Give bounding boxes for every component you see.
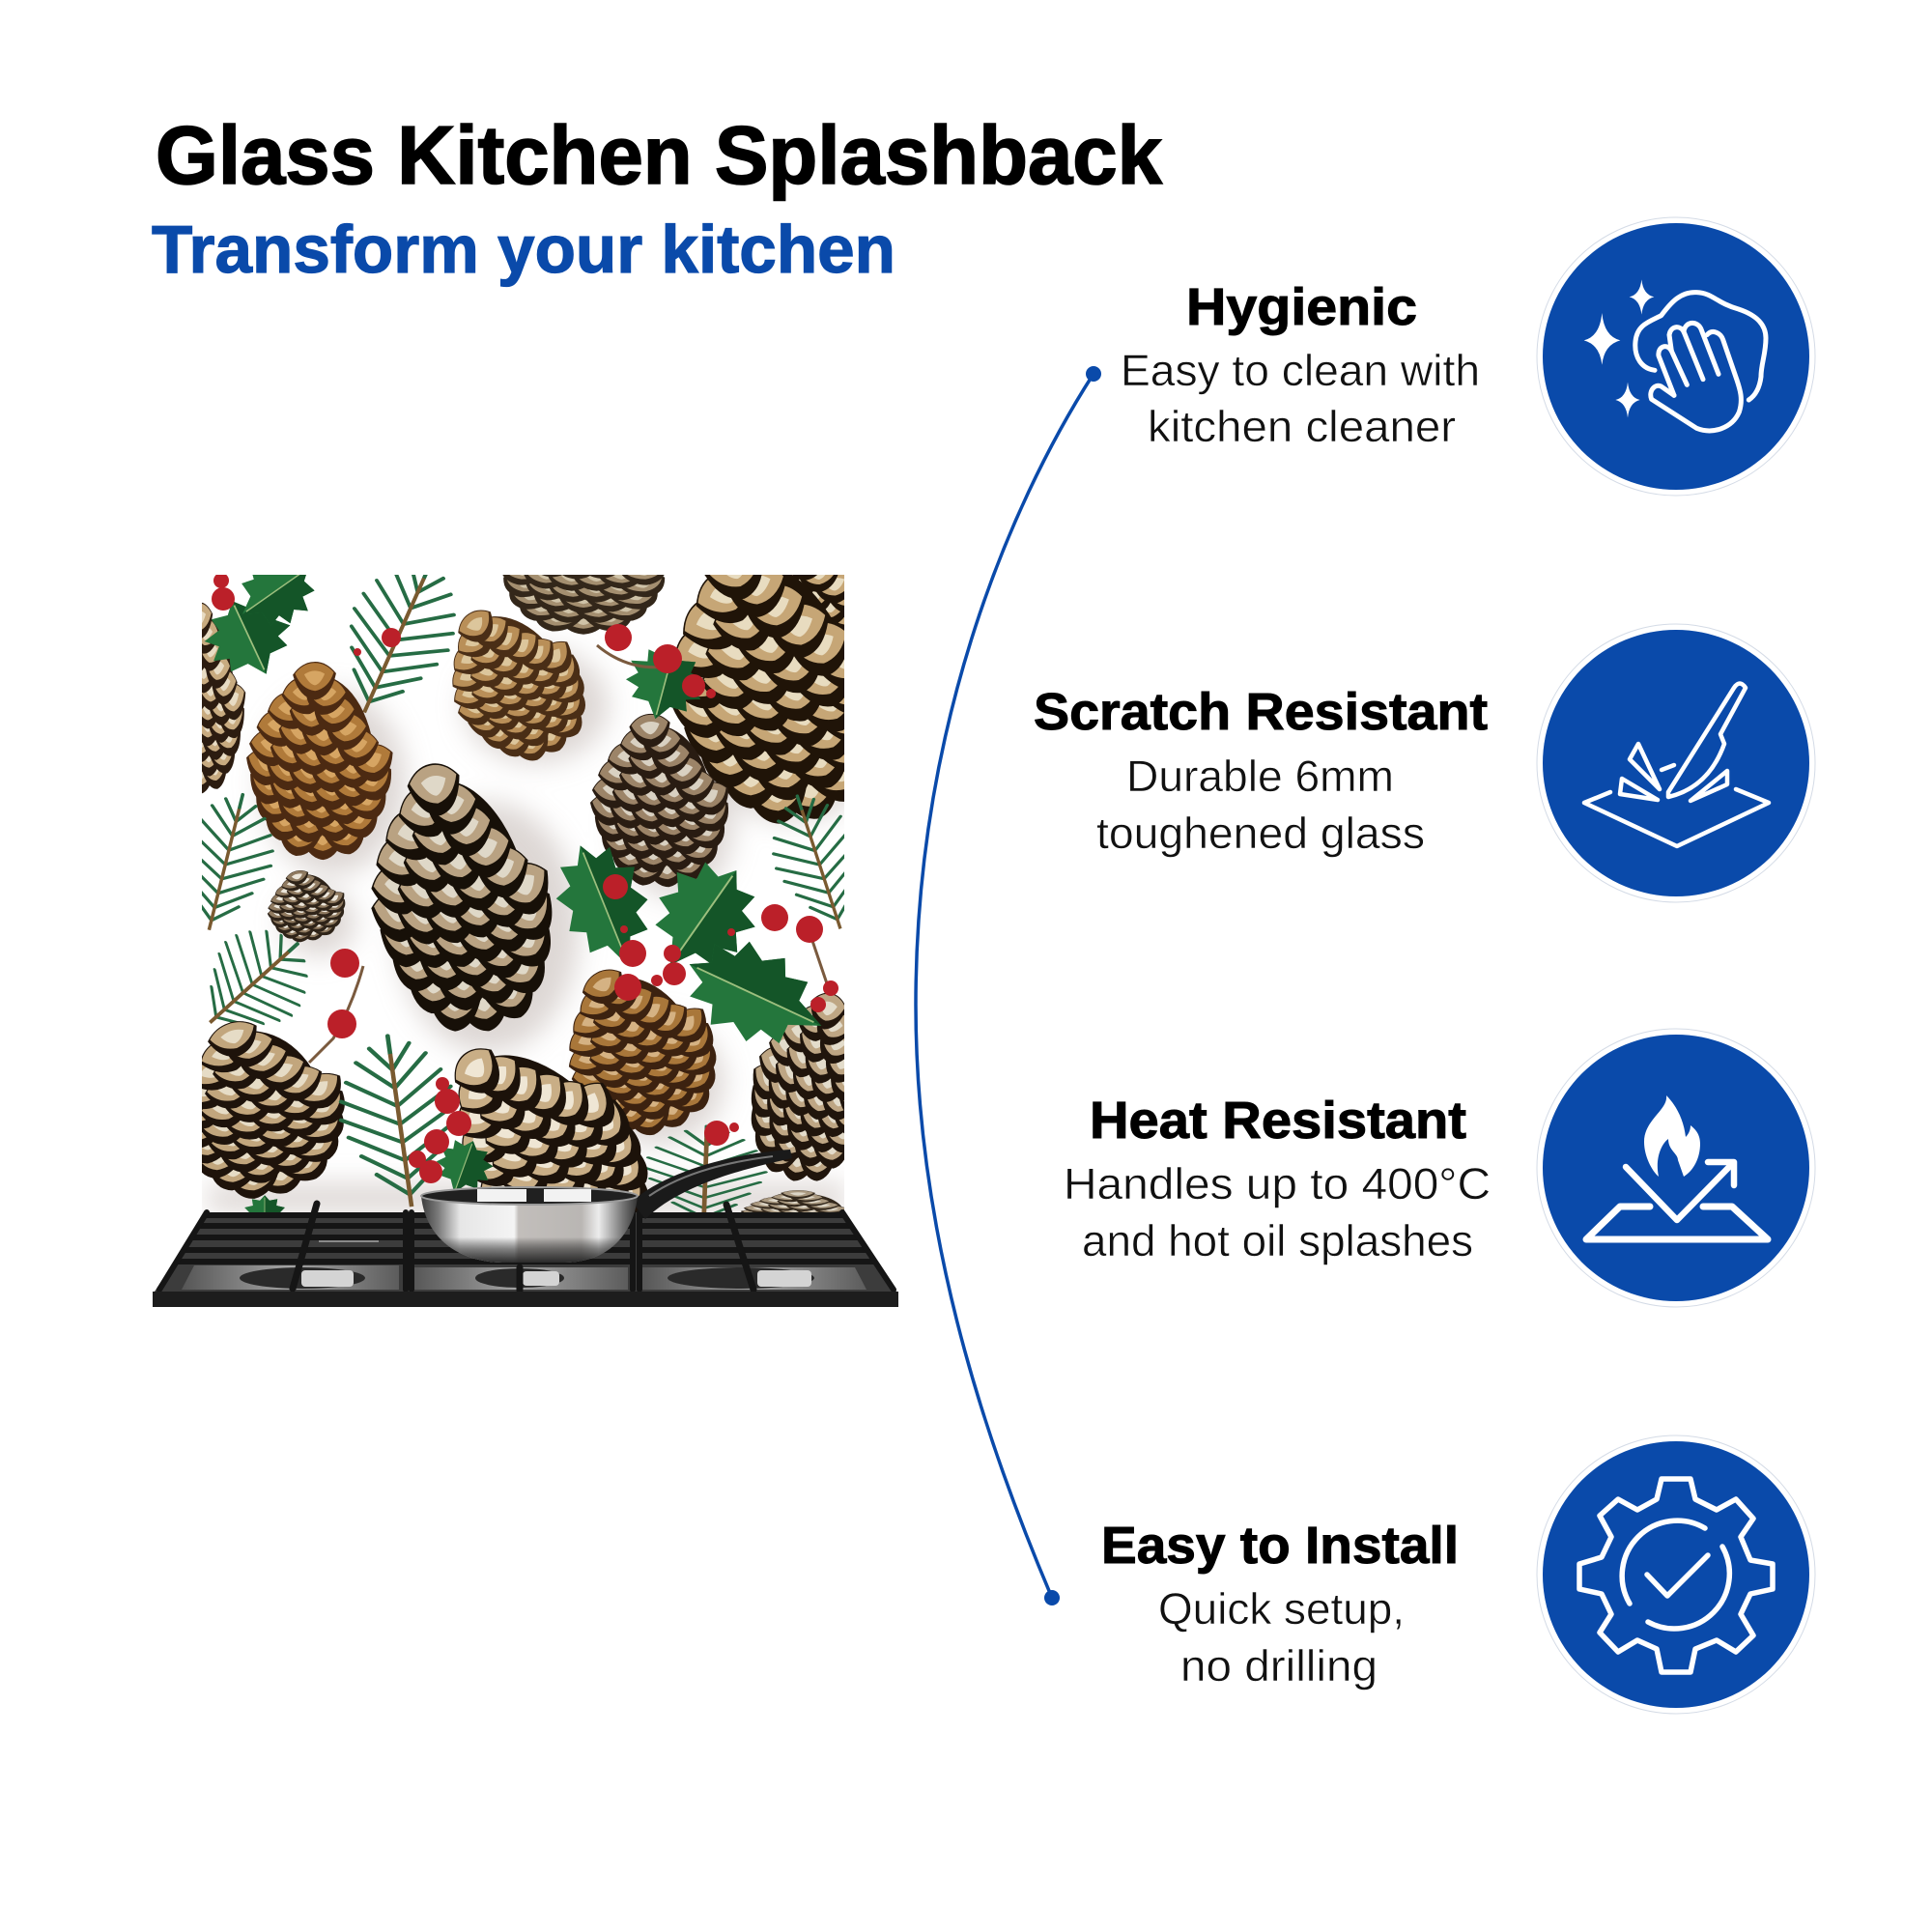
sprig: left middle <box>202 792 274 931</box>
feature: easy to install <box>1101 1517 1459 1690</box>
hob front edge <box>153 1292 898 1307</box>
feature: scratch resistant: Scratch Resistant <box>1034 683 1488 741</box>
cone: top centre <box>502 575 665 635</box>
cone: lower left <box>202 1021 345 1199</box>
cone: small round <box>267 870 346 943</box>
icon: easy to install gear <box>1537 1435 1815 1714</box>
red berries <box>212 573 838 1183</box>
feature: scratch resistant: Durable 6mm <box>1126 752 1394 801</box>
burners <box>240 1235 814 1289</box>
feature: heat resistant: Heat Resistant <box>1090 1092 1466 1150</box>
sprig: bottom right <box>645 1124 768 1212</box>
pan <box>421 1150 792 1263</box>
grates <box>159 1204 894 1291</box>
gas hob <box>153 1204 898 1307</box>
cone: right middle <box>590 713 728 887</box>
title: Glass Kitchen Splashback <box>156 110 1163 202</box>
hob steel panels <box>182 1265 867 1290</box>
holly leaves <box>194 540 840 1236</box>
feature: scratch resistant <box>1034 683 1488 858</box>
sprig: right <box>772 794 844 929</box>
feature: heat resistant <box>1064 1092 1491 1265</box>
feature: hygienic: Easy to clean with <box>1121 346 1480 395</box>
feature: heat resistant: Handles up to 400°C <box>1064 1159 1491 1208</box>
sprig: bottom left centre <box>338 1034 453 1208</box>
cone: lower centre brown <box>568 970 717 1136</box>
icon: scratch resistant knife <box>1537 624 1815 902</box>
feature: easy to install: no drilling <box>1180 1641 1378 1690</box>
icon: hygienic cleaning hand <box>1537 217 1815 496</box>
feature: heat resistant: and hot oil splashes <box>1082 1216 1473 1265</box>
pan rim <box>421 1187 638 1205</box>
feature: hygienic: Hygienic <box>1186 278 1417 336</box>
feature: hygienic <box>1121 278 1480 451</box>
cone: upper left brown <box>246 662 393 860</box>
cone: left edge <box>202 603 245 794</box>
cone: upper right large <box>672 575 844 824</box>
pan body <box>421 1196 638 1263</box>
feature: hygienic: kitchen cleaner <box>1148 402 1456 451</box>
cone: right edge lower <box>752 993 844 1181</box>
cone: bottom right small <box>741 1190 844 1212</box>
sprig: left lower <box>209 929 308 1026</box>
cone: top right filler <box>792 575 844 629</box>
soft shadows <box>208 647 874 1212</box>
feature: easy to install: Quick setup, <box>1158 1584 1405 1634</box>
sprig: top <box>350 575 456 713</box>
berry twigs <box>309 645 831 1063</box>
pan handle <box>632 1150 792 1219</box>
cone: centre large <box>371 763 553 1032</box>
feature: scratch resistant: toughened glass <box>1096 809 1425 858</box>
cone: bottom centre <box>454 1048 647 1212</box>
panel: splashback with pine cone pattern <box>202 575 844 1212</box>
feature: easy to install: Easy to Install <box>1101 1517 1459 1575</box>
icon: heat resistant flame <box>1537 1029 1815 1307</box>
connector curve <box>916 366 1101 1605</box>
cone: upper middle brown <box>452 611 585 761</box>
subtitle: Transform your kitchen <box>152 212 895 287</box>
